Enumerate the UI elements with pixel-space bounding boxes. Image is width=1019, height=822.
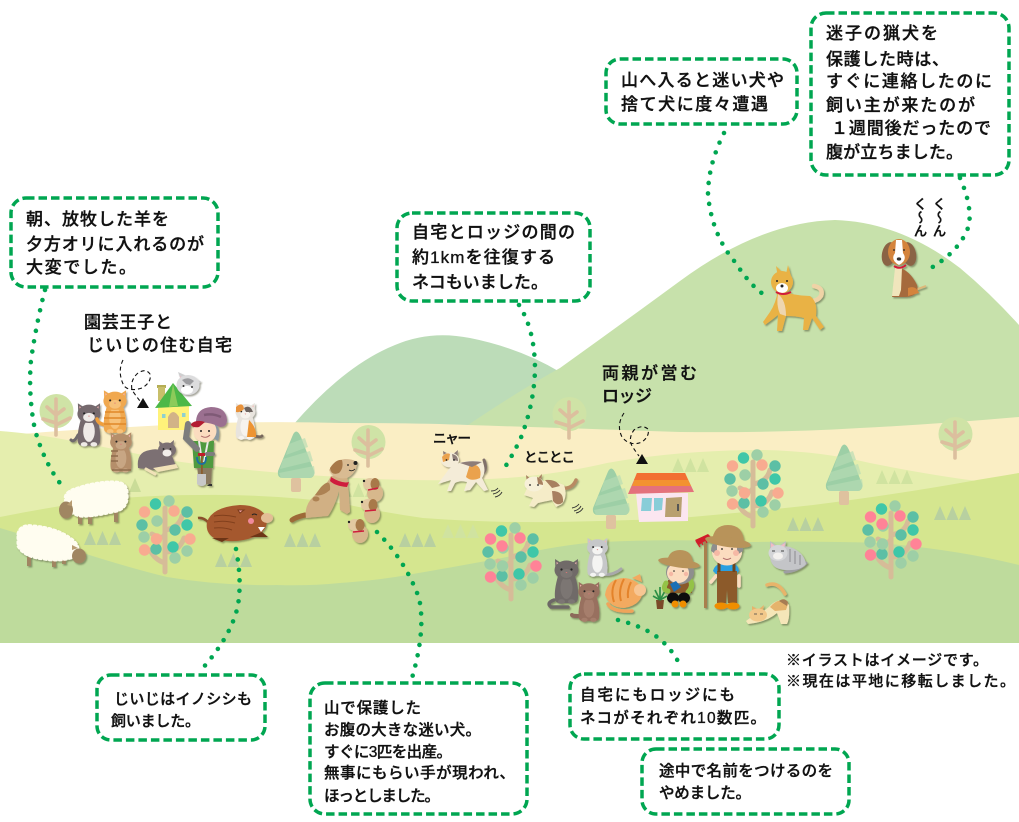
label: lodge	[602, 363, 697, 406]
callout text: 保護した時は、	[826, 50, 949, 69]
callout: sheep	[11, 198, 218, 287]
cat: grey and white	[71, 403, 101, 447]
footnote: ※イラストはイメージです。	[786, 652, 988, 669]
callout text	[659, 762, 833, 802]
icon: cat on roof	[176, 372, 201, 395]
callout text: 捨て犬に度々遭遇	[621, 95, 768, 114]
callout text: 途中で名前をつけるのを	[659, 762, 833, 780]
cat: orange curled	[605, 574, 646, 611]
background landscape	[0, 220, 1019, 643]
sheep	[18, 482, 127, 567]
label: lodge: ロッジ	[602, 387, 652, 406]
cat: dark grey	[549, 559, 578, 607]
callout: boar	[97, 675, 265, 740]
callout text	[111, 691, 252, 730]
dog family	[292, 459, 383, 543]
callout text	[26, 210, 204, 277]
label: first house: 園芸王子と	[84, 313, 172, 332]
cat: light grey	[587, 538, 621, 577]
callout: stray dogs	[606, 59, 797, 124]
pointer: lodge	[619, 413, 648, 464]
character: grandfather with rake	[695, 525, 751, 610]
callout text: 飼いました。	[111, 713, 200, 730]
callout: hunting dog	[811, 13, 1009, 175]
callout text: 腹が立ちました。	[826, 142, 963, 162]
callout text: お腹の大きな迷い犬。	[324, 721, 481, 739]
motion lines	[491, 488, 583, 513]
walking cat: ニャー	[438, 450, 488, 491]
callout text: やめました。	[659, 784, 751, 802]
callout: many cats	[570, 674, 779, 739]
beagle dog	[880, 239, 926, 297]
pointer: first house	[120, 360, 150, 408]
pale green field	[0, 431, 1019, 560]
puppy two	[361, 499, 380, 523]
callout text: すぐに3匹を出産。	[324, 743, 452, 761]
puppy three	[348, 519, 368, 543]
footnote	[786, 652, 1015, 690]
cats at the right	[746, 541, 806, 624]
icon: yellow house	[155, 383, 192, 430]
callout text	[324, 699, 515, 805]
callout text: じいじはイノシシも	[114, 691, 252, 708]
callout text: 無事にもらい手が現われ、	[324, 763, 515, 782]
character: grandmother	[658, 550, 700, 608]
dotted connectors	[30, 133, 970, 678]
label: kuun: く〜ん	[930, 197, 946, 238]
callout text	[826, 24, 992, 162]
callout text: 夕方オリに入れるのが	[26, 234, 204, 254]
callout text	[580, 686, 766, 727]
label: first house	[84, 313, 232, 355]
puppy one	[363, 478, 383, 502]
sheep lower	[18, 526, 86, 567]
dark green foreground	[0, 528, 1019, 643]
label: first house: じいじの住む自宅	[87, 336, 232, 355]
cat: calico	[236, 403, 262, 440]
callout: naming	[642, 749, 849, 814]
callout text: ほっとしました。	[324, 787, 440, 805]
cat: brown	[572, 582, 600, 622]
character: gardening prince	[186, 407, 227, 486]
cat: brown tabby	[110, 432, 132, 473]
cat: orange striped	[97, 390, 127, 434]
callout text: ネコがそれぞれ10数匹。	[580, 708, 766, 727]
callout text	[412, 223, 575, 292]
yellow green field	[0, 473, 1019, 600]
sheep upper	[59, 482, 127, 524]
label: nyaa: ニャー	[433, 431, 471, 446]
cat: stretching calico	[746, 584, 789, 624]
callout text: １週間後だったので	[831, 119, 991, 138]
label: lodge: 両親が営む	[602, 363, 697, 383]
callout text: ネコもいました。	[412, 273, 548, 292]
shiba dog	[763, 265, 824, 331]
dotted blossom trees	[136, 449, 922, 599]
big dog	[292, 459, 358, 520]
small triangles	[84, 458, 971, 567]
back hill	[293, 335, 560, 440]
callout text: 朝、放牧した羊を	[26, 210, 169, 229]
footnote: ※現在は平地に移転しました。	[786, 673, 1015, 690]
callout text: 迷子の猟犬を	[826, 24, 938, 43]
walking cat: とことこ	[524, 474, 576, 507]
label: kuun	[912, 197, 946, 238]
icon: lodge house	[628, 473, 694, 522]
pale round trees	[40, 394, 972, 466]
big right hill	[468, 220, 1019, 500]
callout text: 山で保護した	[324, 699, 421, 717]
callout: pregnant dog	[310, 683, 527, 814]
callout text: 自宅とロッジの間の	[412, 223, 575, 242]
cat: lying grey	[138, 440, 178, 474]
callout text: すぐに連絡したのに	[826, 72, 992, 91]
potted plant	[653, 587, 667, 609]
boar	[198, 505, 273, 542]
cone trees	[278, 432, 863, 529]
callout text: 約1kmを往復する	[412, 248, 555, 267]
label: tokotoko: とことこ	[524, 450, 575, 465]
cat: lying grey tabby	[768, 541, 806, 572]
callout text: 山へ入ると迷い犬や	[621, 71, 784, 90]
label: kuun: く〜ん	[912, 197, 927, 238]
cats beside the lodge	[549, 538, 646, 622]
callout text: 大変でした。	[26, 258, 136, 277]
callout: commuting cat	[397, 213, 590, 301]
callout text: 飼い主が来たのが	[826, 95, 975, 115]
callout text	[621, 71, 784, 114]
cream path band	[0, 417, 1019, 500]
cats around the first house	[71, 390, 262, 474]
callout text: 自宅にもロッジにも	[580, 686, 735, 704]
